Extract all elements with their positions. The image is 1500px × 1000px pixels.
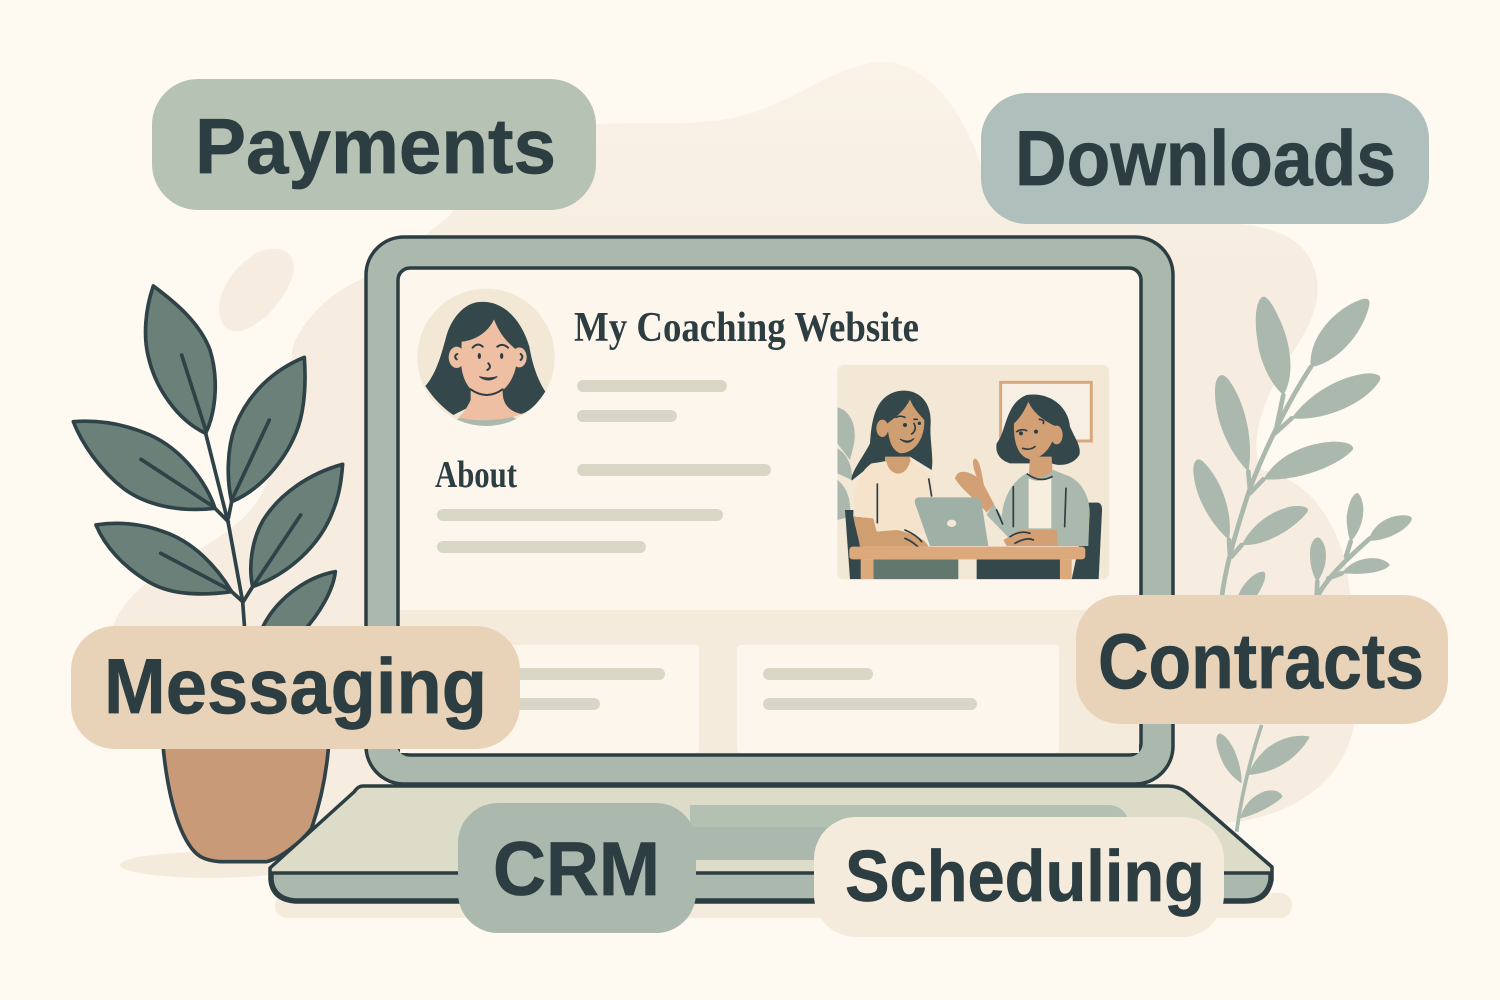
- label: scheduling: [814, 817, 1224, 937]
- label: downloads: Downloads: [1015, 114, 1396, 202]
- label: contracts: [1076, 595, 1448, 724]
- laptop lid: [366, 237, 1173, 784]
- label: crm: [458, 803, 696, 933]
- about heading: About: [435, 454, 517, 496]
- plant stem and leaves: [73, 286, 343, 633]
- label: messaging: Messaging: [104, 642, 487, 730]
- woman left: [852, 391, 958, 579]
- avatar portrait: [417, 289, 555, 427]
- wall frame: [1001, 382, 1091, 441]
- icon: pale sage plant right: [1193, 297, 1412, 598]
- label: crm: CRM: [493, 827, 660, 912]
- label: payments: [152, 79, 596, 210]
- site title: My Coaching Website: [574, 305, 919, 351]
- table: [849, 547, 1085, 559]
- laptop base: [270, 786, 1272, 902]
- plant pot: [163, 737, 328, 862]
- woman right: [955, 395, 1090, 579]
- chairs: [845, 503, 1102, 579]
- laptop on table: [915, 497, 988, 546]
- label: contracts: Contracts: [1098, 617, 1424, 705]
- background plant: [837, 407, 855, 520]
- laptop shadow: [275, 893, 1292, 918]
- background blob: [110, 62, 1357, 850]
- icon: lower right sprig: [1216, 725, 1310, 832]
- label: downloads: [981, 93, 1429, 224]
- laptop: [270, 237, 1272, 902]
- placeholder text lines: [437, 380, 771, 553]
- lower screen band with cards: [400, 610, 1139, 753]
- label: payments: Payments: [195, 102, 556, 190]
- label: messaging: [71, 626, 520, 749]
- icon: dark potted plant: [73, 286, 343, 862]
- label: scheduling: Scheduling: [845, 837, 1205, 917]
- pot shadow: [120, 852, 300, 878]
- screen: [398, 268, 1141, 755]
- photo: two women at a laptop: [837, 365, 1109, 579]
